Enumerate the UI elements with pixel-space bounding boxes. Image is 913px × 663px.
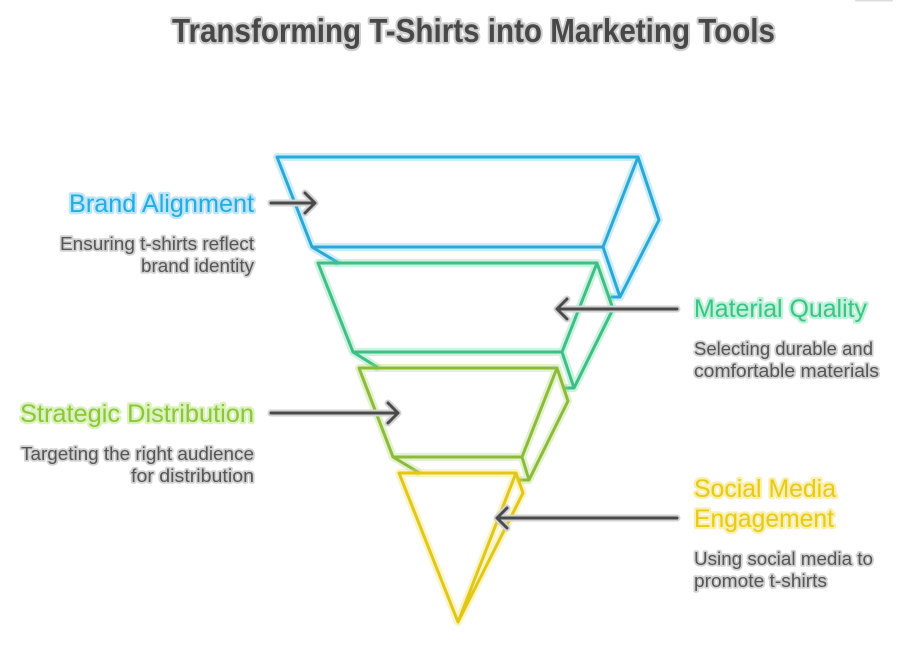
funnel diagram <box>277 157 659 622</box>
label: material quality: Selecting durable and <box>694 339 873 359</box>
label: social media engagement <box>694 475 873 591</box>
label: brand alignment <box>60 190 254 276</box>
arrow: material quality <box>557 299 677 319</box>
label: material quality: comfortable materials <box>694 361 879 381</box>
arrow: strategic distribution <box>271 403 398 423</box>
label: material quality <box>694 295 879 381</box>
top edge mark <box>855 0 893 2</box>
funnel layer: brand alignment (blue) <box>277 157 659 297</box>
label: strategic distribution <box>20 400 254 486</box>
label: social media engagement: promote t-shirts <box>694 571 827 591</box>
arrow: brand alignment <box>271 193 315 213</box>
label: social media engagement: Social Media <box>694 475 836 503</box>
funnel layer: strategic distribution (lime) <box>359 368 568 480</box>
title: Transforming T-Shirts into Marketing Tools <box>172 12 775 49</box>
label: strategic distribution: Strategic Distribution <box>20 400 254 428</box>
label: material quality: Material Quality <box>694 295 867 323</box>
arrow: social media engagement <box>497 508 677 528</box>
label: brand alignment: Ensuring t-shirts reflect <box>60 234 254 254</box>
label: strategic distribution: Targeting the right audience <box>21 444 254 464</box>
label: social media engagement: Using social media to <box>694 549 873 569</box>
label: brand alignment: brand identity <box>141 256 254 276</box>
label: strategic distribution: for distribution <box>131 466 254 486</box>
label: brand alignment: Brand Alignment <box>69 190 254 218</box>
funnel layer: social media engagement (yellow) <box>399 473 523 622</box>
funnel layer: material quality (green) <box>318 263 613 388</box>
label: social media engagement: Engagement <box>694 505 834 533</box>
